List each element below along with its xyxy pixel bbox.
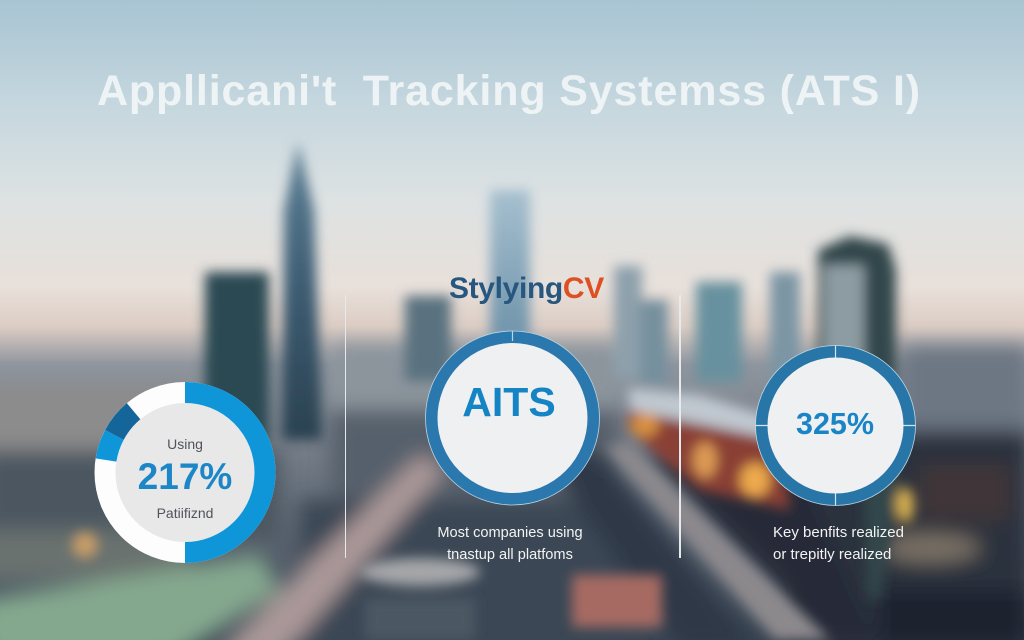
- title: Appllicani't Tracking Systemss (ATS I): [97, 67, 921, 115]
- donut text: platform: Patiifiznd: [157, 505, 213, 521]
- ring value: AITS: AITS: [462, 379, 556, 425]
- caption: companies: tnastup all platfoms: [447, 547, 573, 563]
- logo: StylyingCV: StylyingCV: [449, 272, 604, 305]
- divider: right: [679, 295, 680, 558]
- caption: benefits: [773, 524, 904, 563]
- ring value: percentage: 325%: [796, 407, 874, 441]
- caption: benefits: Key benfits realized: [773, 524, 904, 541]
- caption: benefits: or trepitly realized: [773, 546, 891, 563]
- divider: left: [344, 295, 346, 558]
- caption: companies: [437, 525, 583, 563]
- caption: companies: Most companies using: [437, 525, 583, 541]
- donut value: 217%: [138, 456, 232, 497]
- donut text: using: Using: [167, 436, 203, 452]
